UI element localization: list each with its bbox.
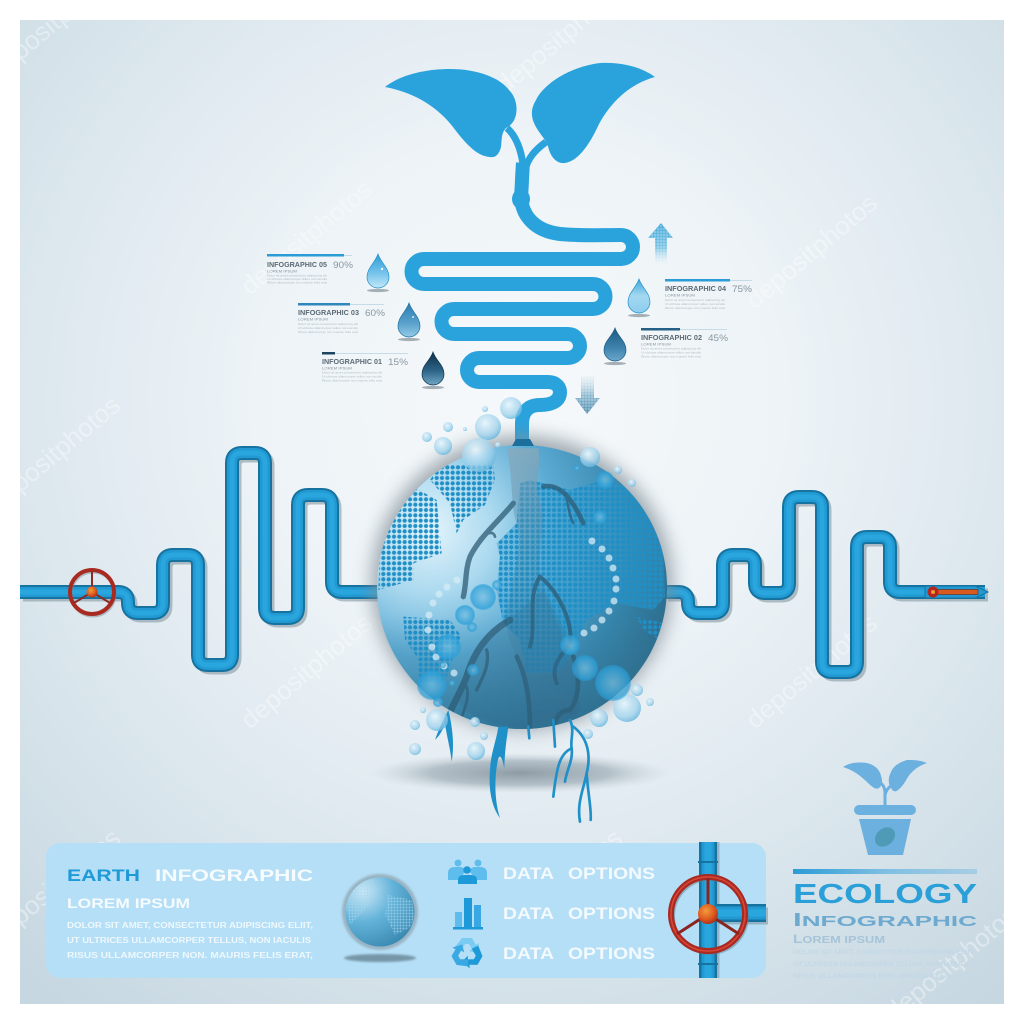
watermarks: depositphotos bbox=[235, 174, 378, 301]
roots inside globe bbox=[447, 448, 583, 728]
valve: left wheel bbox=[70, 570, 115, 616]
label: infographic 03: 60% bbox=[365, 308, 385, 318]
big valve wheel bbox=[671, 877, 747, 953]
dotted world map bbox=[378, 465, 665, 690]
big pipe junction bbox=[698, 842, 768, 978]
watermarks: depositphotos bbox=[740, 188, 883, 315]
panel body text: UT ULTRICES ULLAMCORPER TELLUS, NON IACULIS bbox=[67, 936, 312, 945]
pipeline: left bbox=[20, 453, 383, 668]
label: infographic 02: Ut ultrices ullamcorper tellus non iaculis bbox=[641, 350, 702, 354]
bottom panel: INFOGRAPHIC bbox=[155, 867, 313, 885]
label: infographic 02 bbox=[641, 328, 728, 358]
data option 3 bbox=[503, 945, 655, 963]
leaf: right bbox=[532, 63, 655, 163]
label: infographic 02: INFOGRAPHIC 02 bbox=[641, 335, 702, 342]
label: infographic 04: Ut ultrices ullamcorper tellus non iaculis bbox=[665, 302, 726, 306]
icon: potted plant bbox=[843, 760, 927, 855]
label: infographic 04: INFOGRAPHIC 04 bbox=[665, 286, 726, 293]
icon: drop 01 bbox=[422, 352, 444, 389]
connector: pipe to globe bbox=[512, 439, 534, 446]
label: infographic 03: Risus ullamcorper non mauris felis erat bbox=[298, 330, 358, 334]
label: infographic 01: Dolor sit amet consectetur adipiscing elit bbox=[322, 370, 382, 374]
logo title: ECOLOGY bbox=[793, 878, 977, 909]
up arrow bbox=[648, 223, 673, 264]
logo body text bbox=[793, 950, 975, 980]
label: infographic 05: LOREM IPSUM bbox=[267, 270, 297, 274]
label: infographic 04: Risus ullamcorper non mauris felis erat bbox=[665, 306, 725, 310]
icon: drop 03 bbox=[398, 303, 420, 341]
label: infographic 03: INFOGRAPHIC 03 bbox=[298, 310, 359, 317]
ecology logo bbox=[793, 760, 977, 980]
down arrow bbox=[575, 376, 600, 414]
data option 1: DATA bbox=[503, 865, 554, 883]
icon: drop 05 bbox=[367, 254, 389, 292]
panel body text bbox=[67, 921, 313, 960]
leaf: left bbox=[385, 69, 517, 157]
data option 2 bbox=[503, 905, 655, 923]
data option 2: DATA bbox=[503, 905, 554, 923]
label: infographic 01: Risus ullamcorper non mauris felis erat bbox=[322, 378, 382, 382]
label: infographic 05: Risus ullamcorper non mauris felis erat bbox=[267, 280, 327, 284]
icon: drop 04 bbox=[628, 279, 650, 317]
label: infographic 05: INFOGRAPHIC 05 bbox=[267, 262, 327, 269]
watermarks: depositphotos bbox=[485, 823, 628, 950]
logo body text: DOLOR SIT AMET, CONSECTETUR ADIPISCING ELIIT, bbox=[793, 950, 975, 956]
panel body text: RISUS ULLAMCORPER NON. MAURIS FELIS ERAT, bbox=[67, 951, 313, 960]
bottom panel bbox=[46, 842, 768, 978]
label: infographic 03: LOREM IPSUM bbox=[298, 318, 328, 322]
arrow dot overlay bbox=[575, 223, 673, 414]
data option 1: OPTIONS bbox=[568, 865, 655, 883]
icon: bar chart bbox=[453, 898, 483, 930]
stem branches bbox=[507, 128, 546, 170]
logo bar bbox=[793, 869, 977, 874]
icon: drop 02 bbox=[604, 328, 626, 365]
watermarks: depositphotos bbox=[235, 608, 378, 735]
ground shadow bbox=[370, 753, 670, 793]
globe bottom shade bbox=[377, 445, 667, 729]
label: infographic 02: Dolor sit amet consectetur adipiscing elit bbox=[641, 346, 701, 350]
label: infographic 04 bbox=[665, 279, 752, 310]
label: infographic 04: LOREM IPSUM bbox=[665, 294, 695, 298]
icon: people bbox=[448, 860, 487, 884]
label: infographic 01 bbox=[322, 352, 408, 382]
label: infographic 01: LOREM IPSUM bbox=[322, 366, 352, 370]
globe halo bbox=[372, 436, 672, 730]
label: infographic 02: 45% bbox=[708, 333, 728, 343]
mini globe bbox=[342, 874, 418, 962]
label: infographic 05: 90% bbox=[333, 260, 353, 270]
label: infographic 04: Dolor sit amet consectetur adipiscing elit bbox=[665, 298, 725, 302]
watermarks: depositphotos bbox=[880, 900, 1023, 1024]
stem bulge bbox=[512, 189, 530, 209]
label: infographic 02: Risus ullamcorper non mauris felis erat bbox=[641, 354, 701, 358]
logo lorem: LOREM IPSUM bbox=[793, 932, 885, 946]
tap: right end bbox=[925, 586, 988, 598]
label: infographic 03: Ut ultrices ullamcorper tellus non iaculis bbox=[298, 326, 359, 330]
data option 3: DATA bbox=[503, 945, 554, 963]
label: infographic 05 bbox=[267, 254, 353, 284]
sprout pipe with leaves bbox=[385, 63, 655, 441]
label: infographic 05: Dolor sit amet consectetur adipiscing elit bbox=[267, 274, 327, 278]
data option 3: OPTIONS bbox=[568, 945, 655, 963]
data option 2: OPTIONS bbox=[568, 905, 655, 923]
panel title: EARTH bbox=[67, 867, 140, 885]
label: infographic 03: Dolor sit amet consectetur adipiscing elit bbox=[298, 322, 358, 326]
label: infographic 01: 15% bbox=[388, 357, 408, 367]
label: infographic 03 bbox=[298, 303, 385, 334]
pearl arc bbox=[424, 538, 620, 676]
icon: recycle bbox=[448, 938, 486, 971]
watermarks: depositphotos bbox=[740, 608, 883, 735]
logo body text: RISUS ULLAMCORPER NON. MAURIS FELIS ERAT, bbox=[793, 974, 975, 980]
logo subtitle: INFOGRAPHIC bbox=[793, 910, 977, 930]
globe sphere bbox=[377, 445, 667, 729]
logo body text: UT ULTRICES ULLAMCORPER TELLUS, NON IACULIS bbox=[793, 962, 971, 968]
globe bbox=[377, 445, 667, 729]
panel body text: DOLOR SIT AMET, CONSECTETUR ADIPISCING ELIIT, bbox=[67, 921, 313, 930]
pipeline: right bbox=[665, 497, 988, 675]
bubbles bbox=[409, 397, 654, 760]
label: infographic 01: INFOGRAPHIC 01 bbox=[322, 359, 382, 366]
label: infographic 04: 75% bbox=[732, 284, 752, 294]
label: infographic 02: LOREM IPSUM bbox=[641, 342, 671, 346]
serpentine tube bbox=[411, 163, 633, 441]
data option 1 bbox=[503, 865, 655, 883]
label: infographic 05: Ut ultrices ullamcorper tellus non iaculis bbox=[267, 277, 328, 281]
roots below globe bbox=[435, 710, 591, 822]
panel background bbox=[46, 843, 766, 978]
panel subtitle: LOREM IPSUM bbox=[67, 895, 190, 911]
label: infographic 01: Ut ultrices ullamcorper tellus non iaculis bbox=[322, 374, 383, 378]
